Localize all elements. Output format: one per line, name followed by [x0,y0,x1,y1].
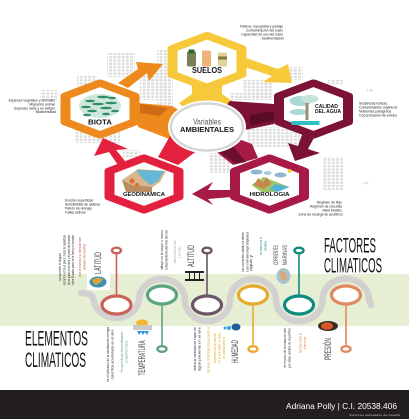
label: hidrologia: HIDROLOGIA [250,192,290,198]
block: temperatura: Por qué influyen estos indicadores [120,331,124,372]
list: geodinamica variables: Patrón de drenaje [65,206,92,210]
block: presion: tierra [303,337,307,349]
list: geodinamica variables: Fallas activas [65,210,86,214]
text: variables: Variables [193,118,221,126]
footer author: Adriana Polly | C.I. 20538.406 [286,402,398,411]
block: altitud [160,229,197,270]
block: presion [283,328,334,368]
list: biota variables: Migración animal [29,102,55,106]
block: humedad: agua presente en el aire [198,327,202,371]
winding road [81,279,371,321]
list: geodinamica variables: Erosión superficial [65,198,93,202]
block: latitud: comprende el ángulo [58,253,62,281]
list: hidrologia variables: Zona de recarga de acuíferos [299,212,343,216]
hexagon: suelos [172,36,242,87]
milestone: altitud [192,248,222,314]
icon: altitude ruler [185,271,204,281]
hexagon: geodinamica [110,158,178,210]
arrow: suelos to calidad del agua [245,58,292,83]
block: latitud: de un punto en la tierra y el plano del ecuador [67,234,71,285]
label: suelos: SUELOS [192,66,223,75]
block: corrientes marinas: Las corrientes cálidas se deben [241,232,245,272]
block: temperatura: es el indicador de la cantidad de energía [106,327,110,382]
block: humedad: en el aire cálido húmedo [218,333,222,363]
milestone: presion [332,286,360,352]
list: calidad del agua variables: Contaminantes orgánicos [359,106,398,110]
label: calidad del agua: CALIDAD [315,104,338,110]
list: calidad del agua variables: Nutrientes patógenos [359,110,392,114]
text: ambientales: AMBIENTALES [180,125,234,134]
block: temperatura: calorífica acumulada en el aire [110,329,114,380]
title: elementos climaticos [25,328,88,372]
label: biota: BIOTA [88,120,112,126]
central ellipse: variables ambientales [168,100,246,154]
hexagon: hidrologia [235,158,304,210]
label: geodinamica: GEODINAMICA [123,192,165,198]
block: presion: es el peso de la masa de aire [283,328,287,368]
block: presion: por cada unidad de superficie [288,328,292,368]
list: hidrologia variables: Regímen de crecidas [310,204,342,208]
footer source: Vectores estimados de freepik [349,413,401,417]
heading: altitud: ALTITUD [186,245,197,267]
block: temperatura: TEMPERATURA [137,340,148,376]
list: hidrologia variables: Nivel freático [322,208,342,212]
block: temperatura [106,327,148,382]
list: biota variables: Biodiversidad [36,110,56,114]
title: factores climaticos [324,234,382,278]
milestone: latitud [102,248,131,314]
icon: watershed landscape [250,169,292,192]
list: suelos variables: Contaminación del suelo [246,28,283,32]
block: humedad: disminuye la humedad relativa cuando la [206,327,210,373]
block: corrientes marinas: MARINAS [282,245,289,265]
icon: globe [87,274,110,290]
block: humedad: la atmósfera [222,337,226,359]
icon: terrain block [122,169,166,192]
list: calidad del agua variables: Sustancias tóxicas [359,102,387,106]
block: latitud: varía de acuerdo a su ubicación norte [78,237,82,277]
block: corrientes marinas: se mueve por el [259,237,263,255]
milestone: temperatura [148,286,176,352]
arrow: geodinamica to biota [94,138,128,165]
dotted world map background [40,50,374,190]
block: corrientes marinas: a que el mar tiene mayor temperatura [246,232,250,272]
block: altitud: y su altura [178,246,182,258]
footer bar [0,390,409,419]
block: humedad: temperatura del aire aumenta [213,333,217,363]
list: hidrologia variables: Régimen de flujo [317,200,342,204]
list: suelos variables: Relieve, topografía y paisaje [240,24,283,28]
heading: latitud: LATITUD [93,252,104,274]
list: geodinamica variables: Sensibilidad de laderas [65,202,100,206]
list: biota variables: Especies vegetales y animales [9,98,55,102]
block: corrientes marinas: CORRIENTES [273,245,280,265]
arrow: biota to suelos [118,62,163,88]
icon: soil jars [187,50,227,66]
heading: presion: PRESIÓN [323,338,334,360]
icon: green species cluster [79,94,121,118]
block: corrientes marinas: océano [264,241,268,251]
block: latitud [58,234,104,285]
connectors from centre to hexagons [138,84,274,165]
block: latitud: latitudes intermedias [82,244,86,270]
block: presion: ejercida sobre la [298,333,302,353]
block: humedad [193,327,241,373]
icon: sun over waves [133,320,152,335]
milestone: corrientes marinas [284,248,314,314]
arrow: hidrologia to geodinamica [192,182,232,205]
icon: ocean globe [276,268,290,284]
hexagon: biota [66,83,134,135]
icon: pressure gauge [318,321,338,331]
block: latitud: existente entre el plano, hasta la superficie [62,235,66,285]
arrow: calidad del agua to hidrologia [288,132,320,161]
block: humedad: HUMEDAD [230,340,241,363]
hexagon: calidad del agua [279,83,348,135]
list: biota variables: Especies raras y en peligro [14,106,55,110]
block: altitud: sobre el nivel del mar [173,240,177,264]
block: altitud: influye en la mayor o menor [160,229,164,270]
block: humedad: indica la cantidad de vapor de [193,327,197,371]
list: calidad del agua variables: Concentración de sólidos [359,114,397,118]
list: suelos variables: Capacidad de uso del suelo [241,32,283,36]
icon: tree and water [290,95,320,125]
block: corrientes marinas: agua y [249,254,253,271]
label: calidad del agua: DEL AGUA [315,109,341,115]
list: suelos variables: Sedimentación [262,36,284,40]
infographic canvas: CLIMATICOS [25,349,86,372]
block: corrientes marinas [241,232,289,272]
green band [0,274,409,326]
milestone: humedad [238,286,268,352]
infographic canvas: ELEMENTOS [25,328,88,350]
block: latitud: sobre Ecuador punto en la tierra y el ecuador [71,234,75,285]
block: temperatura: y calorífica Tierra [124,341,128,363]
icon: water drops [224,324,240,330]
block: altitud: comportamiento del nivel del mar [164,229,168,270]
